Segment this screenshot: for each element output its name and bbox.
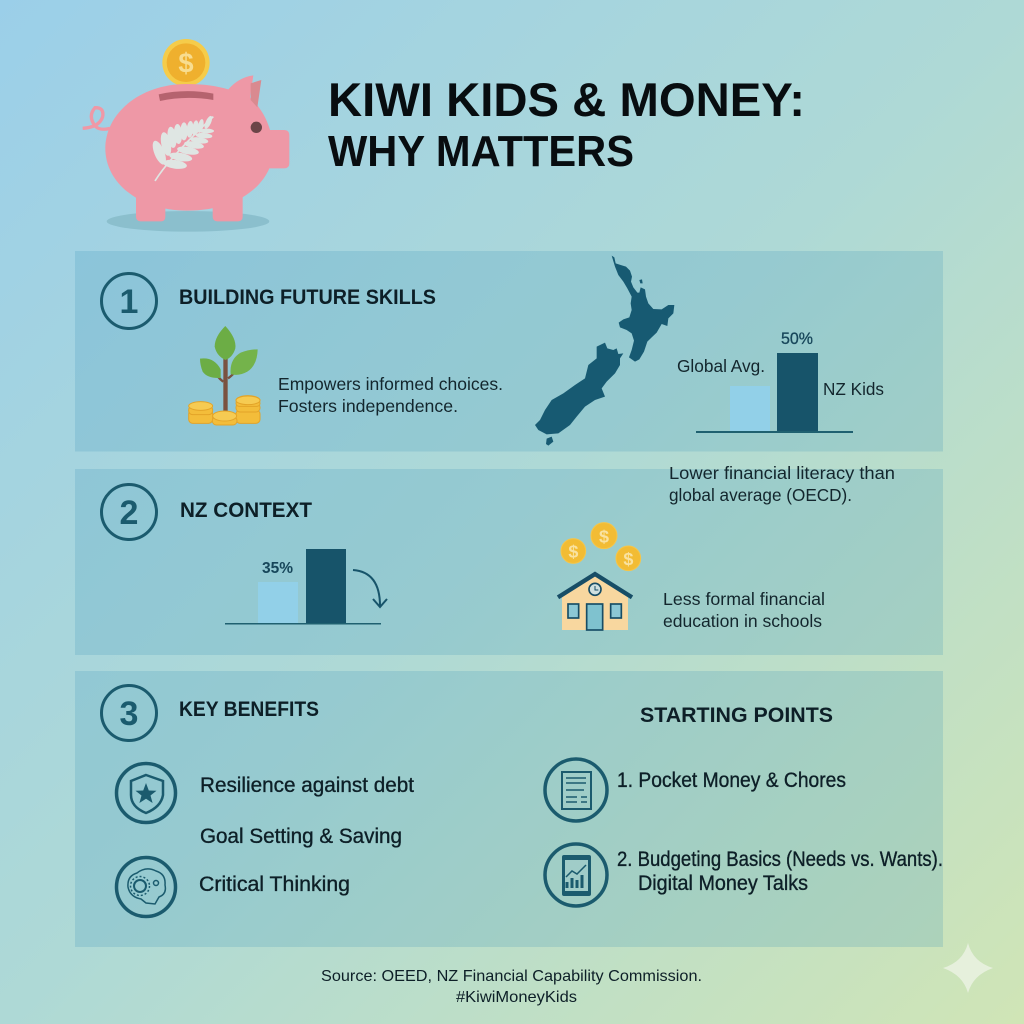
chart: 35 percent bars with down arrow (225, 549, 387, 624)
heading: key benefits: KEY BENEFITS (179, 698, 319, 721)
icon: silver fern (150, 115, 214, 181)
text: skills benefits: Fosters independence. (278, 396, 458, 416)
text: budgeting basics and digital money talks: 2. Budgeting Basics (Needs vs. Wants). (617, 848, 943, 871)
icon: school with coins: $ (568, 542, 578, 562)
number badge 3 (102, 686, 156, 740)
icon: sparkle (943, 943, 993, 993)
text: budgeting basics and digital money talks (617, 848, 943, 895)
icon: plant growing from coins (189, 326, 260, 425)
icon: school with coins: $ (599, 526, 609, 546)
text: goal setting and saving: Goal Setting & Saving (200, 825, 402, 848)
number badge 2 (102, 484, 156, 540)
number badge 1: 1 (120, 283, 138, 321)
callout: lower financial literacy (669, 463, 895, 505)
text: less formal education (663, 589, 825, 631)
arrow: decline (353, 570, 387, 607)
icon: receipt (545, 759, 607, 821)
number badge 2: 2 (120, 494, 138, 532)
text: resilience against debt: Resilience against debt (200, 774, 414, 797)
text: skills benefits (278, 374, 503, 416)
panel: building future skills (75, 251, 943, 452)
text: budgeting basics and digital money talks: Digital Money Talks (638, 872, 808, 895)
heading: NZ context: NZ CONTEXT (180, 499, 312, 522)
text: pocket money and chores: 1. Pocket Money & Chores (617, 769, 846, 792)
chart: 35 percent bars with down arrow: 35% (262, 560, 293, 577)
chart: global average vs NZ kids (677, 330, 884, 433)
icon: school with coins: $ (623, 549, 633, 569)
icon: shield with star (116, 764, 176, 822)
map: New Zealand (535, 256, 674, 446)
callout: lower financial literacy: Lower financial literacy than (669, 463, 895, 483)
source footer: Source: OEED, NZ Financial Capability Commission. (321, 968, 702, 985)
chart: global average vs NZ kids: 50% (781, 330, 813, 348)
text: skills benefits: Empowers informed choices. (278, 374, 503, 394)
icon: tablet with chart (545, 844, 607, 906)
icon: brain with gear (116, 858, 176, 916)
icon: school with coins (558, 523, 641, 630)
title (328, 73, 805, 176)
text: less formal education: education in schools (663, 611, 822, 631)
icon: piggy bank with coin (83, 39, 289, 232)
text: less formal education: Less formal financial (663, 589, 825, 609)
chart: global average vs NZ kids: NZ Kids (823, 379, 884, 399)
panel: NZ context (75, 469, 943, 655)
panel: key benefits and starting points (75, 671, 943, 947)
icon: piggy bank with coin: $ (178, 47, 194, 78)
number badge 1 (102, 274, 156, 328)
heading: building future skills: BUILDING FUTURE SKILLS (179, 286, 436, 309)
title: KIWI KIDS & MONEY: (328, 73, 805, 126)
source footer (321, 968, 702, 1006)
text: critical thinking: Critical Thinking (199, 873, 350, 896)
heading: starting points: STARTING POINTS (640, 704, 833, 727)
source footer: #KiwiMoneyKids (456, 989, 577, 1006)
chart: global average vs NZ kids: Global Avg. (677, 356, 765, 376)
title: WHY MATTERS (328, 127, 634, 176)
number badge 3: 3 (120, 695, 138, 733)
callout: lower financial literacy: global average (OECD). (669, 485, 852, 505)
